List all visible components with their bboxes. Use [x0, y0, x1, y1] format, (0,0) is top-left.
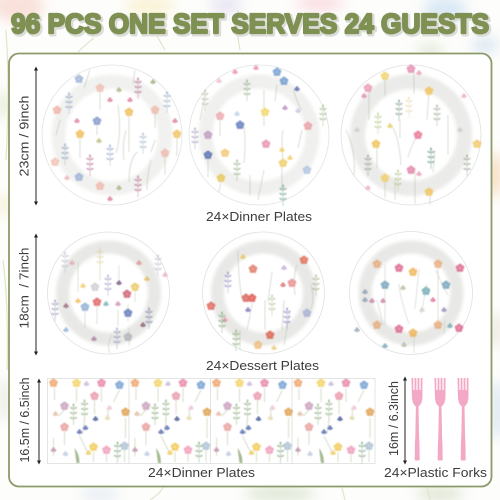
- dinner plate 1: [42, 65, 182, 205]
- dessert plate 3: [350, 232, 472, 354]
- dimension arrow: fork: [386, 376, 407, 464]
- dimension arrow: napkin: 16.5m / 6.5inch: [17, 378, 32, 462]
- dimension arrow: napkin: [17, 378, 41, 464]
- dimension arrow: dessert plate: [16, 234, 38, 356]
- dimension arrow: fork: 16m / 6.3inch: [386, 381, 401, 456]
- dessert plate 2: [202, 232, 324, 354]
- label: dinner plates: 24×Dinner Plates: [206, 209, 313, 224]
- napkins: [48, 378, 375, 464]
- label: dessert plates: 24×Dessert Plates: [206, 358, 320, 373]
- label: forks: 24×Plastic Forks: [384, 465, 488, 480]
- dinner plate 2: [189, 65, 329, 206]
- dimension arrow: dessert plate: 18cm / 7inch: [16, 247, 32, 329]
- forks: [412, 378, 468, 460]
- dessert plate 1: [48, 232, 170, 354]
- dimension arrow: dinner plate: [16, 66, 38, 206]
- dimension arrow: dinner plate: 23cm / 9inch: [16, 96, 32, 176]
- dinner plate 3: [341, 65, 481, 205]
- label: napkins: 24×Dinner Plates: [148, 465, 256, 480]
